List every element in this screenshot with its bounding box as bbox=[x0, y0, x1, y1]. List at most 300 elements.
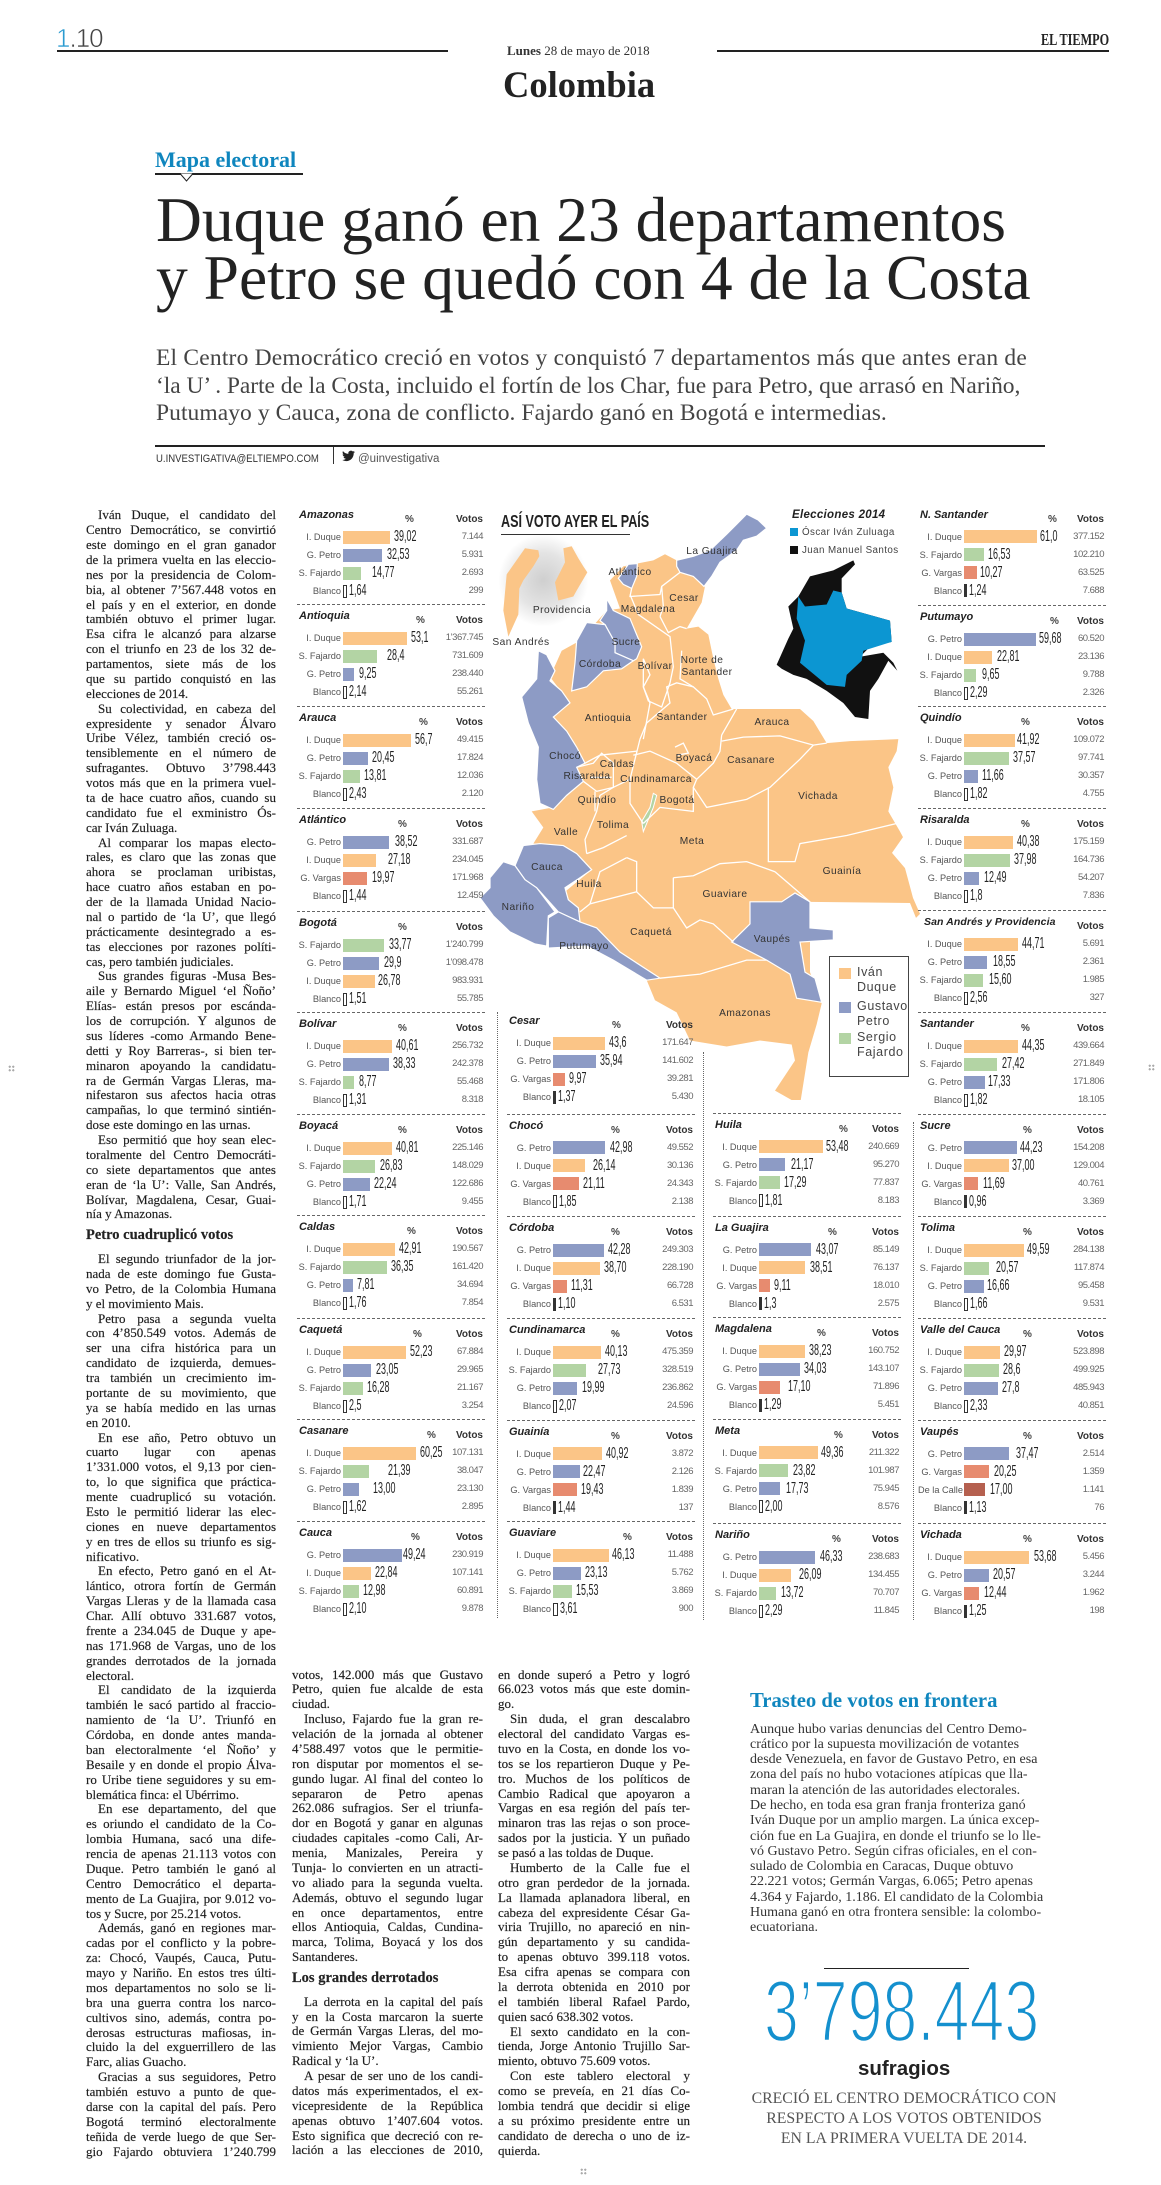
chart: Caldas: 7,81 bbox=[356, 1276, 374, 1293]
chart: Putumayo: Blanco bbox=[934, 688, 962, 698]
chart: Cesar: 35,94 bbox=[600, 1052, 622, 1069]
chart: Valle del Cauca: % bbox=[1023, 1329, 1032, 1340]
byline: @uinvestigativa bbox=[358, 453, 439, 465]
map labels: Meta bbox=[680, 836, 704, 847]
chart: Bogotá: Bogotá bbox=[299, 917, 337, 929]
chart: Guainía: 1.839 bbox=[672, 1484, 693, 1495]
article column 1: campañas, lo que terminó sintién- bbox=[86, 1102, 276, 1117]
chart: Casanare: 38.047 bbox=[457, 1465, 483, 1476]
chart: Sucre bbox=[918, 1116, 1105, 1234]
chart: Chocó: I. Duque bbox=[516, 1160, 551, 1170]
chart: Nariño: Votos bbox=[872, 1534, 899, 1545]
chart: Santander: 439.664 bbox=[1073, 1040, 1104, 1051]
chart: Valle del Cauca: Votos bbox=[1077, 1329, 1104, 1340]
chart: San Andrés y Providencia: San Andrés y Providencia bbox=[924, 916, 1056, 928]
chart: Guaviare: % bbox=[623, 1532, 632, 1543]
chart: Magdalena: 34,03 bbox=[804, 1360, 826, 1377]
chart: Tolima: Votos bbox=[1077, 1227, 1104, 1238]
chart: Bolívar: I. Duque bbox=[306, 1041, 341, 1051]
chart: Huila: 53,48 bbox=[826, 1138, 848, 1154]
chart: San Andrés y Providencia: 5.691 bbox=[1083, 938, 1104, 949]
chart: Valle del Cauca: 40.851 bbox=[1078, 1400, 1104, 1411]
article column 1: y en tres de ellos su triunfo es sig- bbox=[86, 1534, 276, 1549]
legend: map colours bbox=[829, 956, 909, 1077]
chart: Caldas: 1,76 bbox=[348, 1294, 366, 1311]
chart: Guainía: G. Vargas bbox=[510, 1485, 551, 1495]
article column 1: ahora se proclaman uribistas, bbox=[86, 864, 276, 879]
chart: Magdalena: 17,10 bbox=[788, 1378, 810, 1395]
article column 1: mayo y Nariño. En estos tres últi- bbox=[86, 1965, 276, 1980]
map labels: Huila bbox=[576, 879, 602, 890]
map labels: Risaralda bbox=[563, 771, 611, 782]
article column 2: vimiento Mejor Vargas, Cambio bbox=[292, 2038, 483, 2053]
chart: N. Santander: 63.525 bbox=[1078, 566, 1104, 578]
chart: Guainía: I. Duque bbox=[516, 1449, 551, 1459]
article column 1: Char. Allí obtuvo 331.687 votos, bbox=[86, 1608, 276, 1623]
article column 3: to apenas obtuvo 399.118 votos. bbox=[498, 1949, 690, 1964]
chart: Guainía: 22,47 bbox=[583, 1463, 605, 1480]
chart: Antioquia bbox=[297, 606, 484, 724]
chart: Casanare: 23.130 bbox=[457, 1483, 483, 1494]
chart: N. Santander: 7.688 bbox=[1083, 584, 1104, 596]
chart: Atlántico: 234.045 bbox=[452, 854, 483, 865]
chart: Amazonas: 2.693 bbox=[462, 567, 483, 578]
article column 1: expresidente y senador Álvaro bbox=[86, 716, 276, 731]
article column 1: nificativo. bbox=[86, 1549, 139, 1564]
chart: Santander: 1,82 bbox=[970, 1091, 987, 1108]
chart: Tolima: Tolima bbox=[920, 1222, 955, 1234]
article column 3: lombia tendrá que decidir si elige bbox=[498, 2098, 690, 2113]
chart: Antioquia: 2,14 bbox=[348, 683, 366, 700]
chart: Casanare: 13,00 bbox=[372, 1480, 395, 1497]
article column 1: ra de Germán Vargas Lleras, ma- bbox=[86, 1073, 276, 1088]
article column 1: candidato de izquierda, demues- bbox=[86, 1355, 276, 1370]
chart: Quindío: 30.357 bbox=[1078, 770, 1104, 781]
article column 3: electoral del candidato Vargas es- bbox=[498, 1726, 690, 1741]
article column 3: go. bbox=[498, 1696, 514, 1711]
article column 3: tienda, Jorge Antonio Trujillo Sar- bbox=[498, 2038, 690, 2053]
chart: Quindío: I. Duque bbox=[927, 735, 962, 745]
article column 3: tro. Muchos de los políticos de bbox=[498, 1771, 690, 1786]
map labels: Cauca bbox=[531, 862, 563, 873]
article column 2: lación a las elecciones de 2010, bbox=[292, 2142, 483, 2157]
chart: Meta: 23,82 bbox=[792, 1462, 815, 1478]
chart: Boyacá: I. Duque bbox=[306, 1143, 341, 1153]
chart: Atlántico: Blanco bbox=[313, 891, 341, 901]
article column 1: Eso permitió que hoy sean elec- bbox=[98, 1132, 276, 1147]
article column 1: minaron apoyando la candidatu- bbox=[86, 1058, 276, 1073]
chart: Cesar: Cesar bbox=[509, 1015, 540, 1027]
map labels: Santander bbox=[656, 712, 708, 723]
chart: Bogotá: 983.931 bbox=[452, 975, 483, 986]
chart: Arauca: 49.415 bbox=[457, 734, 483, 745]
chart: Atlántico: I. Duque bbox=[306, 855, 341, 865]
map labels: Nariño bbox=[502, 902, 534, 913]
article column 2: ellos Antioquia, Caldas, Cundina- bbox=[292, 1919, 483, 1934]
chart: Casanare: 107.131 bbox=[452, 1447, 483, 1458]
chart: Huila: 8.183 bbox=[878, 1194, 899, 1206]
chart: Quindío: S. Fajardo bbox=[920, 753, 962, 763]
article column 1: partamentos, siete más de los bbox=[86, 656, 276, 671]
chart: Tolima: % bbox=[1023, 1227, 1032, 1238]
chart: Córdoba bbox=[507, 1218, 694, 1336]
legend: map colours: Duque bbox=[857, 980, 897, 994]
chart: Magdalena: G. Vargas bbox=[716, 1382, 757, 1392]
chart: Boyacá: 26,83 bbox=[380, 1157, 402, 1174]
chart: Huila: 240.669 bbox=[868, 1140, 899, 1152]
chart: Quindío: 97.741 bbox=[1078, 752, 1104, 763]
chart: San Andrés y Providencia: 2.361 bbox=[1083, 956, 1104, 967]
chart: Antioquia: Antioquia bbox=[299, 610, 350, 622]
chart: San Andrés y Providencia: 15,60 bbox=[988, 971, 1011, 988]
chart: Chocó: 2.138 bbox=[672, 1196, 693, 1206]
chart: San Andrés y Providencia: Votos bbox=[1077, 921, 1104, 932]
chart: Chocó: 49.552 bbox=[667, 1142, 693, 1152]
chart: Arauca: Votos bbox=[456, 717, 483, 728]
chart: Nariño: % bbox=[832, 1534, 841, 1545]
panel text: 22.221 votos; Germán Vargas, 6.065; Petro apenas bbox=[750, 1874, 1033, 1889]
chart: Magdalena: Blanco bbox=[729, 1400, 757, 1410]
chart: Cauca: 107.141 bbox=[452, 1567, 483, 1578]
article column 1: hace cuatro años estaban en po- bbox=[86, 879, 276, 894]
chart: Santander: S. Fajardo bbox=[920, 1059, 962, 1069]
chart: Boyacá: % bbox=[398, 1125, 407, 1136]
chart: San Andrés y Providencia bbox=[918, 912, 1105, 1030]
chart: Vichada: I. Duque bbox=[927, 1552, 962, 1562]
chart: Valle del Cauca: S. Fajardo bbox=[920, 1365, 962, 1375]
chart: Cauca: Blanco bbox=[313, 1604, 341, 1614]
chart: Caquetá: Caquetá bbox=[299, 1324, 342, 1336]
article column 1: el país y en el exterior, en donde bbox=[86, 597, 276, 612]
article column 1: Esa cifra le alcanzó para alzarse bbox=[86, 626, 276, 641]
headline: Duque ganó en 23 departamentos bbox=[156, 184, 1006, 254]
chart: Bogotá: 55.785 bbox=[457, 993, 483, 1004]
chart: Atlántico: 12.459 bbox=[457, 890, 483, 901]
chart: Vaupés: Votos bbox=[1077, 1431, 1104, 1442]
chart: Santander: % bbox=[1021, 1023, 1030, 1034]
article column 3: Cambio Radical que apoyaron a bbox=[498, 1786, 690, 1800]
chart: Atlántico: Votos bbox=[456, 819, 483, 830]
chart: Huila bbox=[713, 1114, 900, 1232]
panel heading: Trasteo de votos en frontera bbox=[750, 1690, 997, 1712]
chart: Santander: 171.806 bbox=[1073, 1076, 1104, 1087]
article column 3: tuvo en la Costa, en donde los vo- bbox=[498, 1741, 690, 1756]
callout caption: EN LA PRIMERA VUELTA DE 2014. bbox=[781, 2130, 1027, 2147]
map labels: Cesar bbox=[669, 593, 699, 604]
chart: Meta: 49,36 bbox=[821, 1444, 843, 1460]
chart: Vichada: G. Vargas bbox=[921, 1588, 962, 1598]
chart: Cesar: 39.281 bbox=[667, 1073, 693, 1084]
chart: Arauca: G. Petro bbox=[307, 753, 341, 763]
chart: Vaupés: 17,00 bbox=[990, 1481, 1012, 1498]
article column 1: blemática finca: el Ubérrimo. bbox=[86, 1787, 239, 1802]
chart: Caquetá: 67.884 bbox=[457, 1346, 483, 1357]
chart: Sucre: Blanco bbox=[934, 1196, 962, 1206]
panel text: 4.364 y Fajardo, 1.186. El candidato de la Colombia bbox=[750, 1890, 1043, 1905]
chart: Caquetá: % bbox=[413, 1329, 422, 1340]
chart: Amazonas: 1,64 bbox=[348, 582, 366, 599]
callout caption: RESPECTO A LOS VOTOS OBTENIDOS bbox=[766, 2110, 1042, 2127]
chart: Meta: 211.322 bbox=[869, 1446, 899, 1458]
chart: Caquetá: G. Petro bbox=[307, 1365, 341, 1375]
article column 3: cabeza del expresidente César Ga- bbox=[498, 1904, 690, 1920]
chart: Bolívar: 1,31 bbox=[348, 1091, 366, 1108]
article column 1: co siete departamentos que antes bbox=[86, 1162, 276, 1177]
article column 1: En ese departamento, del que bbox=[98, 1801, 276, 1816]
chart: Cundinamarca: Blanco bbox=[523, 1401, 551, 1411]
panel text: maran la atención de las autoridades electorales. bbox=[750, 1783, 1020, 1798]
chart: Bolívar: 242.378 bbox=[452, 1058, 483, 1069]
chart: Guainía: 19,43 bbox=[580, 1481, 603, 1498]
chart: Quindío: G. Petro bbox=[928, 771, 962, 781]
article column 3: La llamada aplanadora liberal, en bbox=[498, 1890, 690, 1905]
article column 2: separaron de Petro apenas bbox=[292, 1786, 483, 1800]
chart: Santander: Santander bbox=[920, 1018, 974, 1030]
chart: Chocó: 24.343 bbox=[667, 1178, 693, 1188]
article column 1: Córdoba, en donde antes manda- bbox=[86, 1727, 276, 1742]
chart: Huila: Huila bbox=[715, 1118, 742, 1130]
chart: Huila: 95.270 bbox=[873, 1158, 899, 1170]
chart: Guaviare: 3.869 bbox=[672, 1585, 693, 1596]
article column 1: Bolívar, Magdalena, Cesar, Guai- bbox=[86, 1192, 276, 1207]
chart: Meta: 17,73 bbox=[786, 1480, 808, 1496]
article column 1: Centro Democrático, se convirtió bbox=[86, 522, 276, 537]
article column 1: cas, pero también judiciales. bbox=[86, 954, 234, 969]
chart: Tolima bbox=[918, 1218, 1105, 1336]
article column 3 bbox=[498, 1666, 690, 2158]
chart: Vichada: 198 bbox=[1090, 1605, 1104, 1616]
chart: Vichada: 53,68 bbox=[1034, 1548, 1056, 1565]
chart: Huila: 21,17 bbox=[790, 1156, 813, 1172]
chart: Cauca: Cauca bbox=[299, 1527, 332, 1539]
chart: Bolívar: 8,77 bbox=[358, 1073, 376, 1090]
map labels: Vichada bbox=[798, 791, 838, 802]
chart: Magdalena: % bbox=[817, 1328, 826, 1339]
chart: Meta: Votos bbox=[872, 1430, 899, 1440]
chart: Caquetá: Votos bbox=[456, 1329, 483, 1340]
chart: Córdoba: Votos bbox=[666, 1227, 693, 1238]
chart: Valle del Cauca: 27,8 bbox=[1002, 1379, 1019, 1396]
article column 1: cluido la del exguerrillero de las bbox=[86, 2039, 276, 2054]
chart: Casanare: 60,25 bbox=[420, 1444, 442, 1461]
chart: Sucre: 3.369 bbox=[1083, 1196, 1104, 1206]
chart: Chocó: 42,98 bbox=[610, 1138, 632, 1156]
chart: Santander: Blanco bbox=[934, 1095, 962, 1105]
chart: Córdoba: 249.303 bbox=[662, 1244, 693, 1255]
article column 1: detti y Roy Barreras-, si bien ter- bbox=[86, 1043, 276, 1058]
chart: Vichada: 5.456 bbox=[1083, 1551, 1104, 1562]
chart: Guaviare: G. Petro bbox=[517, 1568, 551, 1578]
chart: Meta: 75.945 bbox=[873, 1482, 899, 1494]
chart: Risaralda: 54.207 bbox=[1078, 872, 1104, 883]
chart: Risaralda: 7.836 bbox=[1083, 890, 1104, 901]
chart: N. Santander: % bbox=[1048, 514, 1057, 524]
chart: Cundinamarca: I. Duque bbox=[516, 1347, 551, 1357]
article column 3: sados por la justicia. Y un puñado bbox=[498, 1830, 690, 1845]
chart: Amazonas: 7.144 bbox=[462, 531, 483, 542]
chart: Tolima: S. Fajardo bbox=[920, 1263, 962, 1273]
chart: Caquetá: 16,28 bbox=[366, 1379, 389, 1396]
chart: Chocó: Blanco bbox=[523, 1196, 551, 1206]
article column 2: vicepresidente de la República bbox=[292, 2098, 483, 2113]
chart: La Guajira: Blanco bbox=[729, 1298, 757, 1308]
chart: Arauca: Blanco bbox=[313, 789, 341, 799]
article column 1: lombia Humana, sacó una dife- bbox=[86, 1831, 276, 1846]
chart: Meta: % bbox=[834, 1430, 843, 1440]
chart: Nariño: 11.845 bbox=[874, 1605, 899, 1616]
chart: Vaupés bbox=[918, 1422, 1105, 1540]
chart: Magdalena: 71.896 bbox=[873, 1381, 899, 1392]
article column 2: y en la Costa marcaron la suerte bbox=[292, 2009, 483, 2024]
chart: Meta: G. Petro bbox=[723, 1484, 757, 1494]
article column 1: Petro pasa a segunda vuelta bbox=[98, 1311, 276, 1326]
article column 1: ciones en nueve departamentos bbox=[86, 1519, 276, 1534]
article column 1: Sus grandes figuras -Musa Bes- bbox=[98, 968, 276, 983]
chart: Antioquia: 55.261 bbox=[457, 686, 483, 697]
chart: Risaralda: S. Fajardo bbox=[920, 855, 962, 865]
chart: Chocó: Chocó bbox=[509, 1120, 543, 1132]
chart: Cundinamarca: 2,07 bbox=[558, 1397, 576, 1414]
map labels: Córdoba bbox=[579, 659, 621, 670]
map labels: Valle bbox=[554, 827, 578, 838]
chart: Cauca: 9.878 bbox=[462, 1603, 483, 1614]
article column 1: bra una guerra contra los narco- bbox=[86, 1995, 276, 2010]
chart: Atlántico: 19,97 bbox=[372, 869, 394, 886]
panel text: ecuatoriana. bbox=[750, 1920, 818, 1935]
chart: Meta: 8.576 bbox=[878, 1500, 899, 1512]
chart: Sucre: I. Duque bbox=[927, 1160, 962, 1170]
chart: Caldas: 190.567 bbox=[452, 1243, 483, 1254]
chart: La Guajira: I. Duque bbox=[722, 1262, 757, 1272]
kicker: Mapa electoral bbox=[155, 147, 303, 182]
chart: Huila: G. Petro bbox=[723, 1160, 757, 1170]
article column 3: en donde superó a Petro y logró bbox=[498, 1666, 690, 1682]
article column 2: ciudades capitales -como Cali, Ar- bbox=[292, 1830, 483, 1845]
map labels: Cundinamarca bbox=[620, 774, 692, 785]
article column 3: candidato de derecha o uno de iz- bbox=[498, 2128, 690, 2143]
chart: Cauca: 2,10 bbox=[348, 1600, 366, 1617]
page number: 1.10 bbox=[56, 23, 103, 53]
chart: Caldas bbox=[297, 1217, 484, 1335]
chart: Guaviare bbox=[507, 1523, 694, 1641]
chart: San Andrés y Providencia: G. Petro bbox=[928, 957, 962, 967]
chart: Atlántico: G. Vargas bbox=[300, 873, 341, 883]
chart: Caldas: 7.854 bbox=[462, 1297, 483, 1308]
chart: Sucre: 11,69 bbox=[983, 1174, 1005, 1192]
chart: Bolívar: 256.732 bbox=[452, 1040, 483, 1051]
chart: N. Santander: Votos bbox=[1077, 514, 1104, 524]
panel text: Humana ganó en otra frontera sensible: la colombo- bbox=[750, 1905, 1041, 1920]
chart: Huila: S. Fajardo bbox=[715, 1178, 757, 1188]
chart: Risaralda: 40,38 bbox=[1016, 833, 1039, 850]
chart: Valle del Cauca: 485.943 bbox=[1073, 1382, 1104, 1393]
article column 1: grandes derrotados de la jornada bbox=[86, 1653, 276, 1668]
chart: Vaupés: 1.359 bbox=[1083, 1466, 1104, 1477]
map labels: Sucre bbox=[612, 637, 640, 648]
chart: Sucre: 44,23 bbox=[1020, 1138, 1042, 1156]
chart: N. Santander: 1,24 bbox=[968, 582, 986, 598]
chart: Arauca: I. Duque bbox=[306, 735, 341, 745]
chart: N. Santander: G. Vargas bbox=[921, 568, 962, 578]
chart: Cundinamarca: 27,73 bbox=[598, 1361, 620, 1378]
article column 3: quierda. bbox=[498, 2142, 540, 2158]
article column 2: ron disputar por momentos el se- bbox=[292, 1756, 483, 1771]
article column 1: darse con la capital del país. Pero bbox=[86, 2099, 276, 2114]
chart: Boyacá: 22,24 bbox=[374, 1175, 396, 1192]
chart: Atlántico: 331.687 bbox=[452, 836, 483, 847]
chart: Nariño: Blanco bbox=[729, 1606, 757, 1616]
article column 1: que su partido conquistó en las bbox=[86, 671, 276, 686]
chart: Tolima: 95.458 bbox=[1078, 1280, 1104, 1291]
article column 1: Centro Democrático el departa- bbox=[86, 1876, 276, 1891]
chart: Sucre: Votos bbox=[1077, 1124, 1104, 1136]
article column 2: dor en Bogotá y ganar en algunas bbox=[292, 1815, 483, 1830]
chart: Tolima: I. Duque bbox=[927, 1245, 962, 1255]
panel text: sulado de Colombia en Caracas, Duque obtuvo bbox=[750, 1859, 1013, 1874]
chart: Arauca: % bbox=[419, 717, 428, 728]
chart: Cesar: 1,37 bbox=[558, 1088, 575, 1105]
article column 1: Vargas Lleras y de la llamada casa bbox=[86, 1593, 276, 1608]
article column 2: Radical y ‘la U’. bbox=[292, 2053, 379, 2068]
legend: map colours: Iván bbox=[857, 965, 883, 979]
chart: Cesar: 5.430 bbox=[672, 1091, 693, 1102]
chart: San Andrés y Providencia: S. Fajardo bbox=[920, 975, 962, 985]
article column 1: prácticamente desintegrado a es- bbox=[86, 924, 276, 939]
article column 3: la derrota obtenida en 2010 por bbox=[498, 1979, 690, 1994]
chart: Amazonas: 39,02 bbox=[394, 528, 416, 545]
chart: Quindío bbox=[918, 708, 1105, 826]
subheading: Petro cuadruplicó votos: Petro cuadruplicó votos bbox=[86, 1227, 233, 1243]
chart: Nariño: I. Duque bbox=[722, 1570, 757, 1580]
chart: San Andrés y Providencia: Blanco bbox=[934, 993, 962, 1003]
map labels: Casanare bbox=[727, 755, 775, 766]
chart: Córdoba: % bbox=[611, 1227, 620, 1238]
chart: Caldas: 161.420 bbox=[452, 1261, 483, 1272]
chart: Arauca: 2,43 bbox=[348, 785, 366, 802]
chart: Guaviare: 5.762 bbox=[672, 1567, 693, 1578]
article column 1: y el movimiento Mais. bbox=[86, 1296, 204, 1311]
chart: Bolívar: G. Petro bbox=[307, 1059, 341, 1069]
icon: 2014 results mini map bbox=[776, 560, 898, 719]
map labels: Amazonas bbox=[719, 1008, 771, 1019]
legend: map colours: Gustavo bbox=[857, 999, 908, 1013]
chart: Chocó: G. Vargas bbox=[510, 1178, 551, 1188]
article column 1: candidato fue el exministro Ós- bbox=[86, 805, 276, 820]
article column 1: también estuvo a punto de que- bbox=[86, 2084, 276, 2099]
panel text bbox=[750, 1722, 1043, 1935]
chart: Vichada: Votos bbox=[1077, 1534, 1104, 1545]
chart: N. Santander: I. Duque bbox=[927, 532, 962, 542]
chart: Quindío: 37,57 bbox=[1013, 749, 1035, 766]
map labels: Providencia bbox=[533, 605, 591, 616]
article column 1: toralmente del Centro Democráti- bbox=[86, 1147, 276, 1162]
chart: Valle del Cauca: 29,97 bbox=[1004, 1343, 1026, 1360]
article column 1: 1’331.000 votos, el 9,13 por cien- bbox=[86, 1459, 276, 1474]
chart: Vichada: % bbox=[1023, 1534, 1032, 1545]
chart: La Guajira: 85.149 bbox=[873, 1244, 899, 1254]
article column 2: Santanderes. bbox=[292, 1949, 358, 1964]
article column 1: rales, es claro que las zonas que bbox=[86, 849, 276, 864]
map labels: Putumayo bbox=[559, 941, 609, 952]
chart: Amazonas: Amazonas bbox=[299, 509, 354, 521]
article column 1: ro Uribe tiene seguidores y su em- bbox=[86, 1772, 276, 1787]
article column 1: elecciones de 2014. bbox=[86, 686, 188, 701]
article column 1: Al comparar los mapas electo- bbox=[98, 835, 276, 850]
chart: Magdalena: Magdalena bbox=[715, 1323, 772, 1335]
chart: Córdoba: 1,10 bbox=[558, 1295, 575, 1312]
chart: Guaviare: Guaviare bbox=[509, 1527, 556, 1539]
map labels: Santander bbox=[681, 667, 733, 678]
